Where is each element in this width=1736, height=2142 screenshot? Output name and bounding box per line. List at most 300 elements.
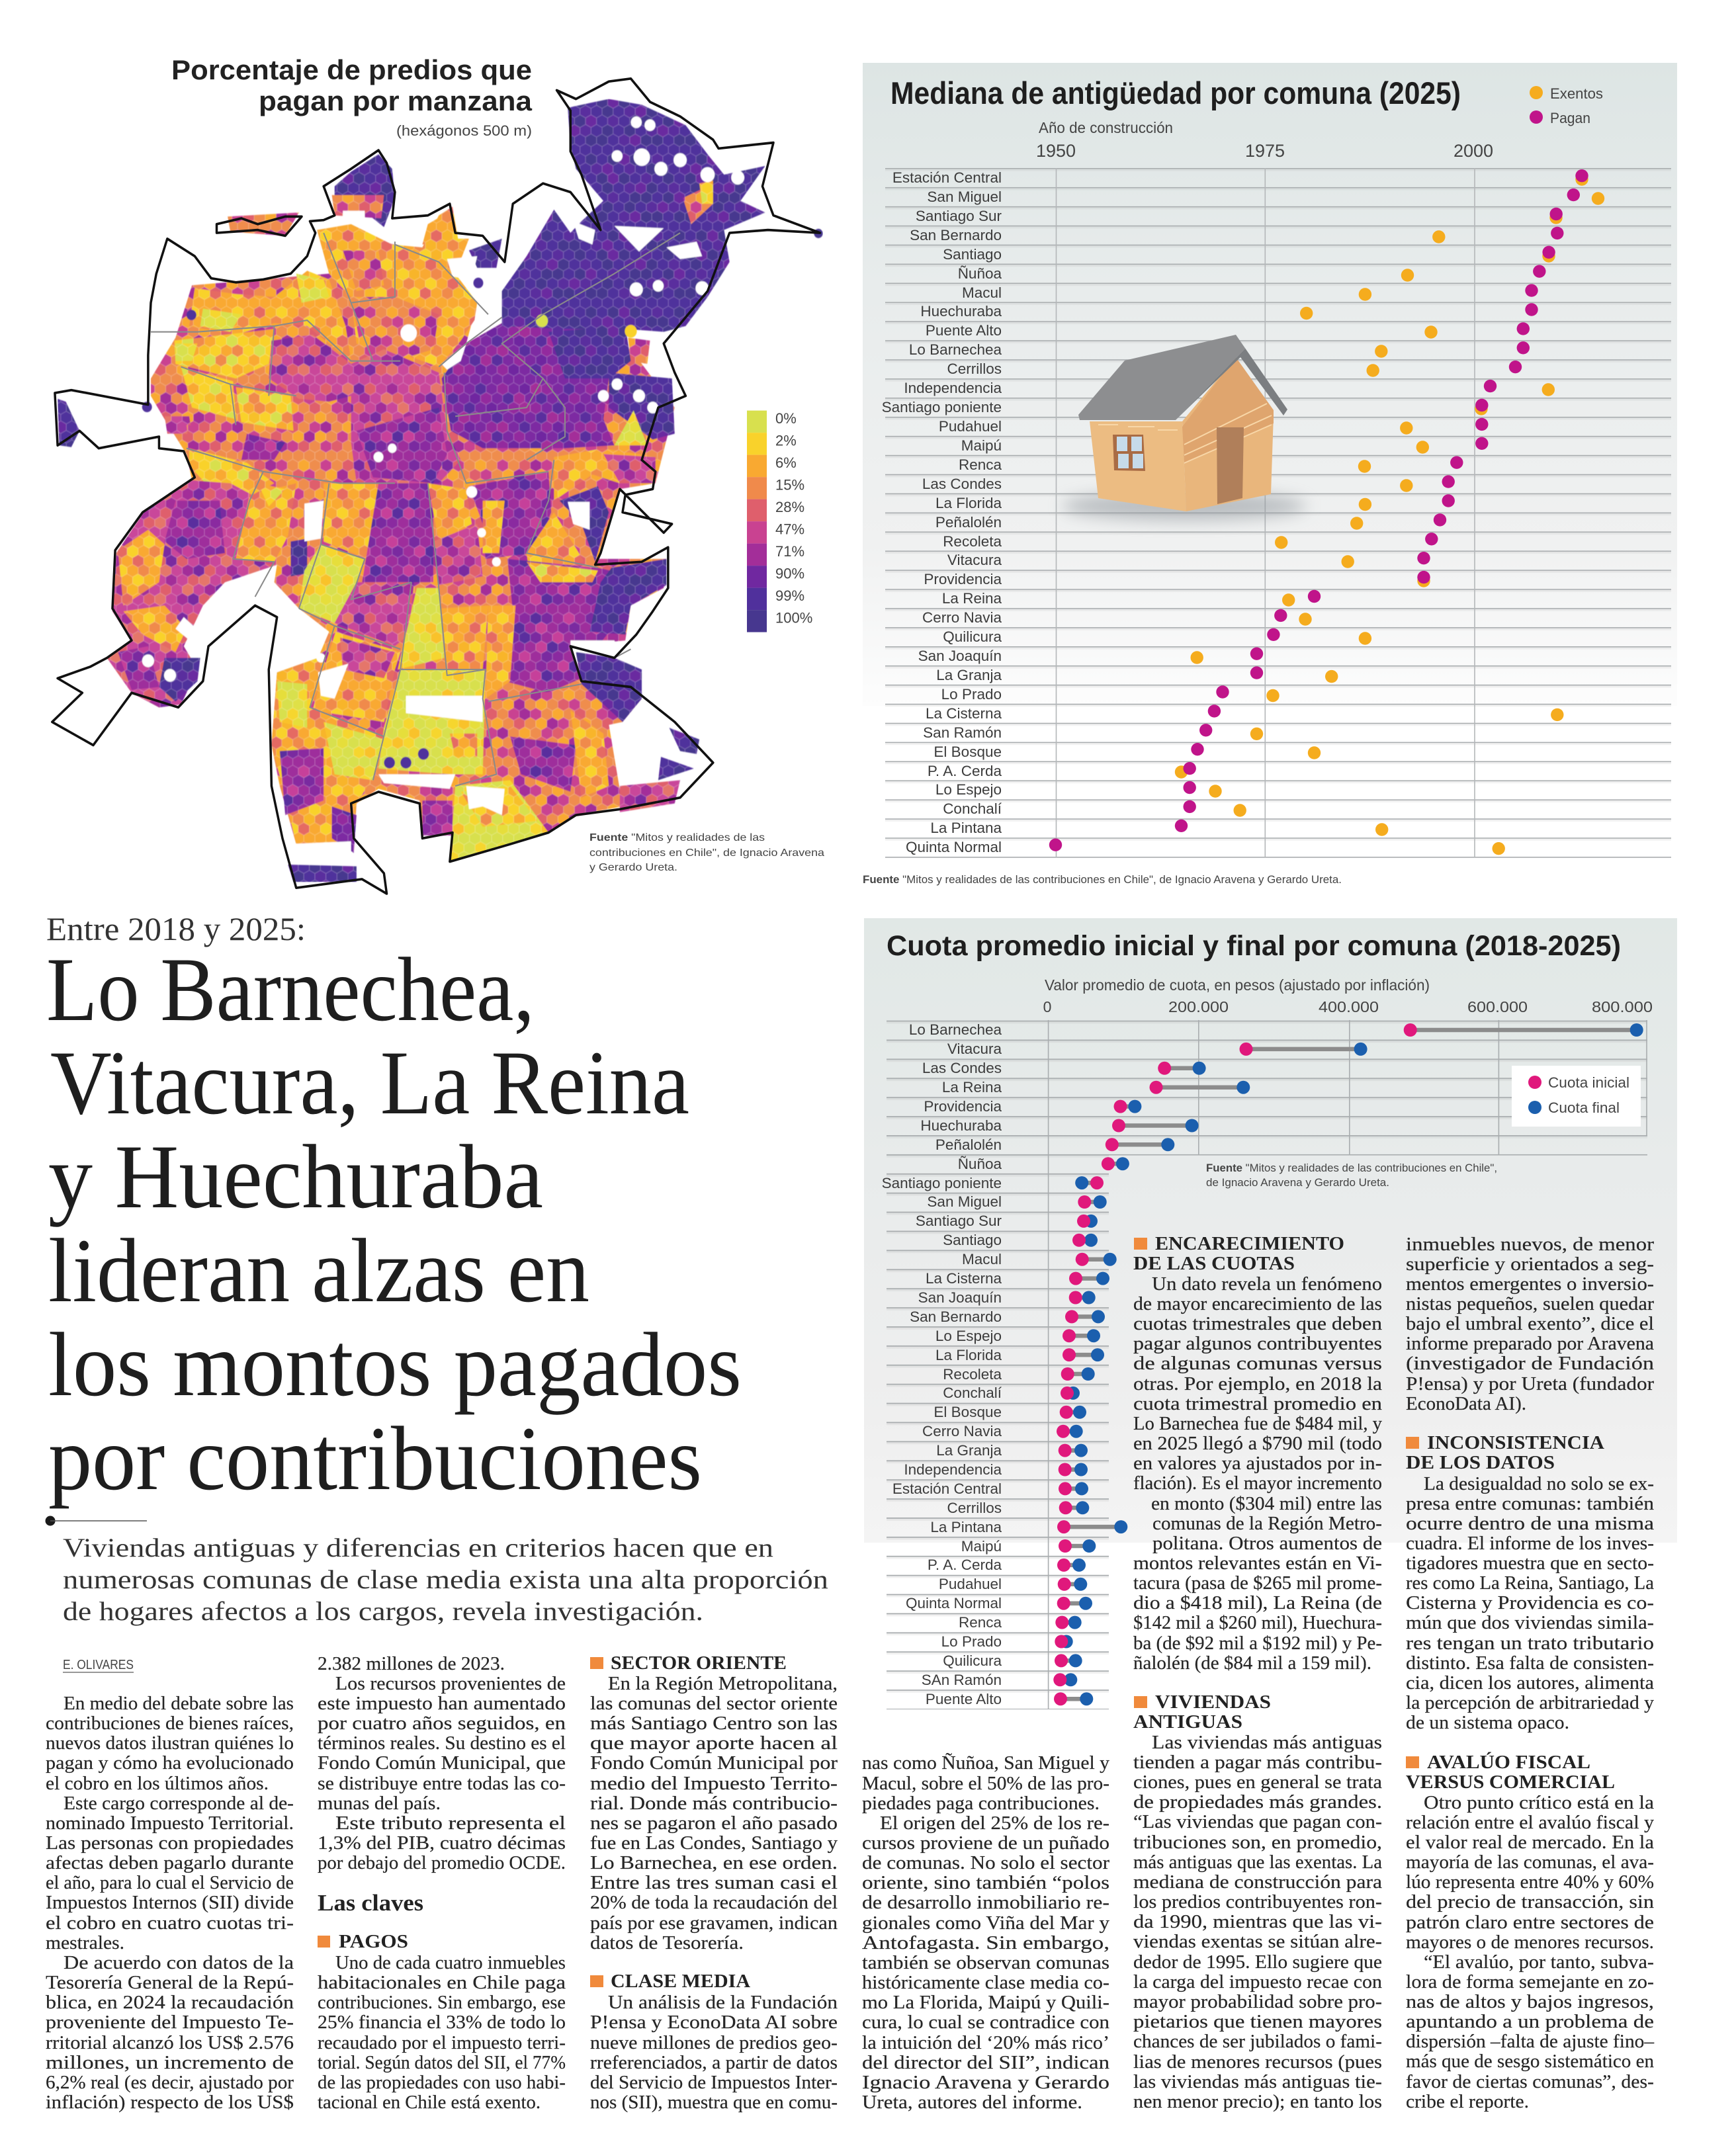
chart 2 background panel — [864, 918, 1677, 1543]
key point: pagos: PAGOS — [339, 1932, 408, 1952]
key point: pagos: habitacionales en Chile paga — [318, 1973, 566, 1993]
chart 2 comuna labels: Pudahuel — [939, 1576, 1002, 1592]
chart 1 dots: exentos — [1175, 173, 1604, 855]
key point: clase media: del Servicio de Impuestos Inter- — [590, 2073, 838, 2093]
main headline: los montos pagados — [48, 1314, 742, 1415]
chart 1 comuna labels: Lo Barnechea — [909, 341, 1002, 358]
chart 2 comuna labels: Puente Alto — [926, 1691, 1002, 1707]
chart 2 axis labels — [1043, 976, 1653, 1015]
key point: viviendas antiguas: viendas exentas se sitúan alre- — [1133, 1932, 1382, 1952]
key point: viviendas antiguas: informe preparado por Aravena — [1406, 1334, 1655, 1354]
text column 2: términos reales. Su destino es el — [318, 1733, 566, 1754]
chart 2 comuna labels: Las Condes — [922, 1060, 1002, 1076]
chart 1 comuna labels: Macul — [962, 284, 1002, 301]
key point: viviendas antiguas: ciones, pues en general se trata — [1133, 1772, 1383, 1793]
deck: Viviendas antiguas y diferencias en criterios hacen que en — [63, 1533, 773, 1563]
chart 1 comuna labels: P. A. Cerda — [928, 763, 1002, 779]
key point: viviendas antiguas: “Las viviendas que pagan con- — [1133, 1812, 1382, 1832]
key point: pagos: de las propiedades con uso habi- — [318, 2073, 566, 2093]
map source note — [589, 832, 824, 873]
key point: inconsistencia de los datos — [1406, 1433, 1655, 1733]
key point: avalúo fiscal versus comercial: lora de forma semejante en zo- — [1406, 1972, 1654, 1992]
chart 1 dots: pagan — [1049, 169, 1588, 851]
chart 2 comuna labels: Santiago — [943, 1232, 1002, 1248]
key point: viviendas antiguas: bajo el umbral exento”, dice el — [1406, 1314, 1654, 1334]
chart 2 axis labels: 400.000 — [1319, 998, 1379, 1015]
key point: viviendas antiguas: superficie y orientados a seg- — [1406, 1254, 1654, 1275]
map legend: 15% — [775, 476, 804, 493]
text column 1: De acuerdo con datos de la — [64, 1953, 294, 1973]
key point: avalúo fiscal versus comercial: relación entre el avalúo fiscal y — [1406, 1813, 1654, 1833]
headline block — [45, 910, 828, 1626]
key point: encarecimiento de las cuotas: otras. Por ejemplo, en 2018 la — [1133, 1374, 1383, 1394]
key point: clase media: históricamente clase media co- — [862, 1973, 1109, 1993]
key point: pagos — [318, 1932, 566, 2113]
key point: avalúo fiscal versus comercial: apuntando a un problema de — [1406, 2012, 1654, 2032]
chart 1 comuna labels: Maipú — [961, 437, 1002, 454]
key point: viviendas antiguas: (investigador de Fundación — [1406, 1353, 1654, 1374]
chart 1 comuna labels: San Bernardo — [910, 227, 1002, 243]
key point: clase media: de comunas. No solo el sector — [862, 1853, 1110, 1873]
key point: inconsistencia de los datos: res tengan un trato tributario — [1406, 1633, 1654, 1654]
key point: avalúo fiscal versus comercial: favor de ciertas comunas”, des- — [1406, 2072, 1654, 2092]
text column 1: contribuciones de bienes raíces, — [46, 1713, 294, 1734]
key point: encarecimiento de las cuotas: de algunas comunas versus — [1133, 1353, 1382, 1374]
chart 2 comuna labels: Huechuraba — [920, 1117, 1002, 1134]
chart 1 comuna labels: Vitacura — [947, 552, 1002, 568]
panel: median building age per comuna chart — [863, 63, 1677, 886]
text column 2: Fondo Común Municipal, que — [318, 1753, 566, 1774]
key point: clase media: Antofagasta. Sin embargo, — [862, 1933, 1109, 1953]
main headline: lideran alzas en — [48, 1220, 589, 1321]
key point: inconsistencia de los datos: cuadra. El informe de los inves- — [1406, 1533, 1654, 1554]
key point: inconsistencia de los datos: mún que dos viviendas simila- — [1406, 1613, 1654, 1633]
chart 1 comuna labels: San Joaquín — [918, 648, 1002, 664]
key point: inconsistencia de los datos: INCONSISTENCIA — [1427, 1433, 1605, 1453]
chart 2 axis labels: 600.000 — [1467, 998, 1528, 1015]
key point: encarecimiento de las cuotas: Lo Barnechea fue de $484 mil, y — [1133, 1414, 1382, 1434]
chart 2 comuna labels: Quilicura — [943, 1652, 1002, 1669]
chart 1 comuna labels: Peñalolén — [935, 514, 1002, 531]
key point: encarecimiento de las cuotas: cuotas trimestrales que deben — [1133, 1314, 1382, 1334]
chart 2 comuna labels: El Bosque — [933, 1404, 1002, 1420]
chart 2 comuna labels: Lo Prado — [941, 1633, 1002, 1650]
heading: Las claves: Las claves — [318, 1890, 423, 1916]
key point: inconsistencia de los datos: presa entre comunas: también — [1406, 1494, 1654, 1514]
key point: viviendas antiguas: inmuebles nuevos, de menor — [1406, 1234, 1655, 1255]
key point: encarecimiento de las cuotas: en monto ($304 mil) entre las — [1151, 1494, 1382, 1514]
chart 1 comuna labels: La Cisterna — [926, 705, 1002, 722]
key point: clase media: oriente, sino también “polos — [862, 1873, 1109, 1893]
map title — [171, 54, 533, 116]
chart 2 comuna labels: La Granja — [936, 1442, 1002, 1459]
chart 2 comuna labels — [882, 1021, 1002, 1707]
key point: clase media: Un análisis de la Fundación — [608, 1992, 838, 2013]
chart 2 comuna labels: La Reina — [942, 1079, 1002, 1095]
chart 2 legend — [1512, 1066, 1641, 1127]
chart 2 comuna labels: Macul — [962, 1251, 1002, 1267]
key point: viviendas antiguas: chances de ser jubilados o fami- — [1133, 2032, 1382, 2052]
chart 1 comuna labels: La Granja — [936, 667, 1002, 683]
text column 1: Las personas con propiedades — [46, 1833, 294, 1854]
key point: pagos: recaudado por el impuesto terri- — [318, 2033, 566, 2053]
chart 2 source note: Fuente "Mitos y realidades de las contribuciones en Chile", — [1206, 1162, 1497, 1174]
key point: sector oriente: datos de Tesorería. — [590, 1933, 744, 1953]
text column 1: afectas deben pagarlo durante — [46, 1853, 294, 1873]
chart 1 axis labels: Año de construcción — [1039, 119, 1173, 136]
chart 2 comuna labels: Independencia — [904, 1461, 1002, 1478]
chart 2 comuna labels: Lo Barnechea — [909, 1021, 1002, 1038]
map title: pagan por manzana — [259, 85, 533, 116]
chart 1 comuna labels: Santiago Sur — [916, 208, 1002, 224]
text column 1: pagan y cómo ha evolucionado — [46, 1753, 294, 1774]
key point: encarecimiento de las cuotas: flación). Es el mayor incremento — [1133, 1473, 1382, 1494]
map legend — [747, 410, 812, 632]
chart 1 comuna labels: Quilicura — [943, 628, 1002, 645]
key point: clase media: gionales como Viña del Mar y — [862, 1913, 1109, 1934]
chart 2 comuna labels: Santiago Sur — [916, 1213, 1002, 1229]
text column 2: 1,3% del PIB, cuatro décimas — [318, 1833, 566, 1854]
chart 1 background panel — [863, 63, 1677, 706]
key point: viviendas antiguas: ANTIGUAS — [1133, 1712, 1242, 1733]
key point: viviendas antiguas: P!ensa) y por Ureta (fundador — [1406, 1374, 1655, 1394]
chart 1 comuna labels: Quinta Normal — [906, 839, 1002, 855]
text column 2: Este tributo representa el — [335, 1813, 566, 1834]
key point: viviendas antiguas: de propiedades más grandes. — [1133, 1792, 1382, 1813]
chart 1 comuna labels — [882, 169, 1002, 855]
key point: viviendas antiguas: la carga del impuesto recae con — [1133, 1972, 1382, 1992]
chart 2 axis labels: 0 — [1043, 998, 1051, 1015]
key point: viviendas antiguas: nen menor precio); en tanto los — [1133, 2092, 1382, 2112]
key point: inconsistencia de los datos: Cisterna y Providencia es co- — [1406, 1593, 1654, 1613]
chart 2 comuna labels: La Florida — [935, 1347, 1002, 1363]
chart 1 legend: Exentos — [1550, 85, 1603, 102]
key point: sector oriente: que mayor aporte hacen al — [590, 1733, 838, 1754]
key point: viviendas antiguas: VIVIENDAS — [1155, 1692, 1271, 1713]
key point: encarecimiento de las cuotas: ba (de $92 mil a $192 mil) y Pe- — [1133, 1633, 1382, 1654]
chart 1 comuna labels: Santiago — [943, 246, 1002, 263]
key point: encarecimiento de las cuotas: politana. Otros aumentos de — [1152, 1533, 1382, 1554]
black regional outline — [52, 79, 820, 894]
key point: encarecimiento de las cuotas: DE LAS CUOTAS — [1133, 1254, 1295, 1274]
key point: inconsistencia de los datos: de un sistema opaco. — [1406, 1713, 1569, 1733]
map legend: 2% — [775, 433, 797, 449]
chart 2 comuna labels: Vitacura — [947, 1041, 1002, 1057]
key point: clase media: El origen del 25% de los re- — [880, 1813, 1109, 1834]
key point: sector oriente: Lo Barnechea, en ese orden. — [590, 1853, 838, 1873]
chart 2 grid — [887, 1020, 1647, 1709]
key point: encarecimiento de las cuotas: dio a $418 mil), La Reina (de — [1133, 1593, 1382, 1613]
panel: average initial and final quota chart — [864, 918, 1677, 1709]
chart 2 comuna labels: Maipú — [961, 1538, 1002, 1555]
chart 2 comuna labels: San Miguel — [927, 1193, 1002, 1210]
text column 1: el cobro en los últimos años. — [46, 1774, 269, 1794]
text column 2: por debajo del promedio OCDE. — [318, 1853, 566, 1873]
text column 1: el año, para lo cual el Servicio de — [46, 1873, 294, 1893]
key point: avalúo fiscal versus comercial: Otro punto crítico está en la — [1424, 1793, 1655, 1813]
key point: avalúo fiscal versus comercial: cribe el reporte. — [1406, 2092, 1529, 2112]
key point: encarecimiento de las cuotas: en 2025 llegó a $790 mil (todo — [1133, 1434, 1382, 1454]
key point: sector oriente: En la Región Metropolitana, — [608, 1674, 838, 1694]
map source note: contribuciones en Chile", de Ignacio Aravena — [589, 847, 824, 859]
key point: viviendas antiguas: pietarios que tienen mayores — [1133, 2012, 1382, 2032]
key point: clase media: rreferenciados, a partir de datos — [590, 2053, 838, 2073]
byline: E. OLIVARES — [63, 1658, 134, 1672]
chart 2 comuna labels: San Joaquín — [918, 1289, 1002, 1306]
key point: sector oriente: 20% de toda la recaudación del — [590, 1893, 838, 1913]
map legend: 99% — [775, 587, 804, 604]
chart 1 comuna labels: Providencia — [924, 571, 1002, 587]
key point: inconsistencia de los datos: res como La Reina, Santiago, La — [1406, 1573, 1655, 1594]
key point: avalúo fiscal versus comercial — [1406, 1752, 1655, 2112]
chart 1 comuna labels: El Bosque — [933, 744, 1002, 760]
main headline: y Huechuraba — [48, 1126, 543, 1227]
key point: pagos: 25% financia el 33% de todo lo — [318, 2012, 566, 2033]
key point: clase media: cursos proviene de un puñado — [862, 1833, 1109, 1854]
chart 2 comuna labels: Providencia — [924, 1098, 1002, 1115]
key point: clase media: de desarrollo inmobiliario re- — [862, 1893, 1109, 1913]
icon: house illustration — [1062, 335, 1307, 521]
chart 2 comuna labels: Lo Espejo — [935, 1328, 1002, 1344]
text column 1 — [46, 1693, 294, 2113]
chart 1 comuna labels: Lo Prado — [941, 686, 1002, 703]
map legend: 0% — [775, 410, 797, 427]
key point: viviendas antiguas: tienden a pagar más contribu- — [1133, 1752, 1382, 1773]
key point: avalúo fiscal versus comercial: más que de sesgo sistemático en — [1406, 2051, 1654, 2072]
key point: sector oriente: medio del Impuesto Territo- — [590, 1774, 838, 1794]
key point: viviendas antiguas: da 1990, mientras que las vi- — [1133, 1912, 1382, 1932]
chart 2 comuna labels: La Pintana — [930, 1519, 1002, 1535]
main headline — [46, 939, 742, 1509]
key point: clase media: nueve millones de predios geo- — [590, 2033, 838, 2053]
key point: sector oriente: fue en Las Condes, Santiago y — [590, 1833, 838, 1854]
key point: inconsistencia de los datos: cia, dicen los autores, alimenta — [1406, 1673, 1655, 1693]
text column 2: se distribuye entre todas las co- — [318, 1774, 566, 1794]
chart 2 comuna labels: San Bernardo — [910, 1308, 1002, 1325]
text column 1: 6,2% real (es decir, ajustado por — [46, 2073, 294, 2093]
key point: viviendas antiguas: lias de menores recursos (pues — [1133, 2052, 1382, 2073]
map source note: y Gerardo Ureta. — [589, 862, 677, 873]
key point: avalúo fiscal versus comercial: patrón claro entre sectores de — [1406, 1912, 1654, 1933]
chart 1 comuna labels: Cerrillos — [947, 361, 1002, 377]
text column 1: Impuestos Internos (SII) divide — [46, 1893, 294, 1913]
key point: sector oriente: Fondo Común Municipal por — [590, 1753, 838, 1774]
key point: sector oriente: más Santiago Centro son las — [590, 1713, 838, 1734]
chart 1 title: Mediana de antigüedad por comuna (2025) — [890, 75, 1461, 110]
key point: viviendas antiguas: nistas pequeños, suelen quedar — [1406, 1294, 1655, 1314]
chart 1 grid — [885, 168, 1671, 858]
chart 1 comuna labels: Conchalí — [943, 800, 1002, 817]
key point: sector oriente: país por ese gravamen, indican — [590, 1913, 838, 1934]
key point: clase media: Macul, sobre el 50% de las pro- — [862, 1774, 1109, 1794]
key point: clase media: del director del SII”, indican — [862, 2053, 1109, 2073]
chart 2 source note: de Ignacio Aravena y Gerardo Ureta. — [1206, 1176, 1389, 1189]
chart 1 comuna labels: La Reina — [942, 590, 1002, 607]
chart 1 comuna labels: Las Condes — [922, 476, 1002, 492]
key point: pagos: torial. Según datos del SII, el 77% — [318, 2053, 566, 2073]
chart 2 axis labels: Valor promedio de cuota, en pesos (ajustado por inflación) — [1045, 976, 1430, 994]
text column 2: Los recursos provenientes de — [335, 1674, 566, 1694]
key point: inconsistencia de los datos: La desigualdad no solo se ex- — [1424, 1474, 1654, 1494]
key point: clase media: Ignacio Aravena y Gerardo — [862, 2073, 1109, 2093]
key point: clase media — [590, 1753, 1110, 2113]
text column 1: mestrales. — [46, 1933, 124, 1953]
map subtitle: (hexágonos 500 m) — [396, 122, 532, 139]
key point: sector oriente — [590, 1653, 838, 1953]
chart 1 axis labels: 1975 — [1245, 141, 1285, 161]
text column 1: En medio del debate sobre las — [64, 1693, 294, 1714]
map legend: 28% — [775, 499, 804, 515]
key point: inconsistencia de los datos: ocurre dentro de una misma — [1406, 1514, 1655, 1534]
chart 2 comuna labels: La Cisterna — [926, 1270, 1002, 1287]
key point: encarecimiento de las cuotas: en valores ya ajustados por in- — [1133, 1453, 1382, 1474]
key point: viviendas antiguas: los predios contribuyentes ron- — [1133, 1892, 1382, 1912]
chart 1 comuna labels: San Miguel — [927, 189, 1002, 205]
text column 1: blica, en 2024 la recaudación — [46, 1992, 294, 2013]
key point: clase media: nos (SII), muestra que en comu- — [590, 2092, 838, 2113]
key point: clase media: piedades paga contribuciones. — [862, 1793, 1100, 1814]
main headline: por contribuciones — [48, 1408, 702, 1509]
deck — [63, 1533, 828, 1626]
chart 2 source note — [1206, 1162, 1497, 1189]
key point: encarecimiento de las cuotas: montos relevantes están en Vi- — [1133, 1553, 1382, 1574]
chart 2 comuna labels: Renca — [959, 1614, 1002, 1631]
key point: encarecimiento de las cuotas: cuota trimestral promedio en — [1133, 1394, 1382, 1414]
key point: inconsistencia de los datos: tigadores muestra que en secto- — [1406, 1553, 1654, 1574]
key point: encarecimiento de las cuotas: tacura (pasa de $265 mil prome- — [1133, 1573, 1382, 1594]
chart 1 axis labels: 1950 — [1036, 141, 1076, 161]
chart 1 comuna labels: Estación Central — [892, 169, 1002, 186]
key point: sector oriente: nes se pagaron el año pasado — [590, 1813, 838, 1834]
chart 1 comuna labels: La Florida — [935, 495, 1002, 511]
chart 1 comuna labels: Huechuraba — [920, 303, 1002, 320]
key point: avalúo fiscal versus comercial: lúo representa entre 40% y 60% — [1406, 1872, 1654, 1893]
text column 2 — [318, 1654, 566, 1873]
key point: avalúo fiscal versus comercial: “El avalúo, por tanto, subva- — [1424, 1952, 1654, 1973]
chart 1 legend: Pagan — [1550, 110, 1590, 126]
chart 1 comuna labels: Independencia — [904, 380, 1002, 396]
key point: viviendas antiguas: dedor de 1995. Ello sugiere que — [1133, 1952, 1382, 1973]
chart 2 comuna labels: Estación Central — [892, 1480, 1002, 1497]
chart 1 comuna labels: Renca — [959, 456, 1002, 473]
key point: avalúo fiscal versus comercial: AVALÚO FISCAL — [1427, 1752, 1590, 1773]
chart 2 comuna labels: Quinta Normal — [906, 1595, 1002, 1611]
map title: Porcentaje de predios que — [171, 54, 532, 85]
chart 1 comuna labels: Lo Espejo — [935, 781, 1002, 798]
key point: viviendas antiguas: mentos emergentes o inversio- — [1406, 1274, 1654, 1295]
key point: sector oriente: Entre las tres suman casi el — [590, 1873, 838, 1893]
chart 2 dots: cuota inicial — [1053, 1023, 1417, 1705]
key point: inconsistencia de los datos: distinto. Esa falta de consisten- — [1406, 1653, 1654, 1674]
map legend: 71% — [775, 543, 804, 560]
chart 2 comuna labels: Santiago poniente — [882, 1175, 1002, 1191]
chart 1 comuna labels: San Ramón — [923, 724, 1002, 741]
chart 1 comuna labels: Recoleta — [943, 533, 1002, 550]
key point: encarecimiento de las cuotas: comunas de la Región Metro- — [1152, 1514, 1382, 1534]
key point: clase media: cura, lo cual se contradice con — [862, 2012, 1109, 2033]
text column 1: millones, un incremento de — [46, 2053, 294, 2073]
key point: inconsistencia de los datos: DE LOS DATOS — [1406, 1453, 1555, 1473]
key point: clase media: P!ensa y EconoData AI sobre — [590, 2012, 838, 2033]
key point: viviendas antiguas: las viviendas más antiguas tie- — [1133, 2072, 1382, 2092]
chart 2 axis labels: 800.000 — [1592, 998, 1653, 1015]
text column 1: Este cargo corresponde al de- — [64, 1793, 294, 1814]
chart 2 axis labels: 200.000 — [1168, 998, 1229, 1015]
chart 1 comuna labels: La Pintana — [930, 820, 1002, 836]
key point: viviendas antiguas: mayor probabilidad sobre pro- — [1133, 1992, 1382, 2012]
text column 1: inflación) respecto de los US$ — [46, 2092, 294, 2113]
text column 2: por cuatro años seguidos, en — [318, 1713, 566, 1734]
deck: de hogares afectos a los cargos, revela investigación. — [63, 1596, 703, 1626]
chart 2 comuna labels: Cerro Navia — [922, 1423, 1002, 1439]
chart 1 comuna labels: Santiago poniente — [882, 399, 1002, 415]
chart 1 comuna labels: Pudahuel — [939, 418, 1002, 435]
map legend: 6% — [775, 454, 797, 471]
key point: avalúo fiscal versus comercial: mayoría de las comunas, el ava- — [1406, 1852, 1654, 1873]
map panel: percentage of paying properties per block — [52, 54, 824, 894]
chart 2 comuna labels: Peñalolén — [935, 1136, 1002, 1153]
key point: viviendas antiguas: tribuciones son, en promedio, — [1133, 1832, 1382, 1853]
chart 1 comuna labels: Ñuñoa — [958, 265, 1002, 282]
key point: clase media: la intuición del ‘20% más rico’ — [862, 2033, 1109, 2053]
text column 2: 2.382 millones de 2023. — [318, 1654, 505, 1674]
key point: encarecimiento de las cuotas — [1133, 1234, 1383, 1674]
key point: clase media: también se observan comunas — [862, 1953, 1109, 1973]
key point: viviendas antiguas: mediana de construcción para — [1133, 1872, 1383, 1893]
text column 2: este impuesto han aumentado — [318, 1693, 566, 1714]
main headline: Vitacura, La Reina — [50, 1032, 689, 1133]
headline rule with dot — [45, 1516, 147, 1525]
chart 2 comuna labels: Ñuñoa — [958, 1156, 1002, 1172]
text column 1: el cobro en cuatro cuotas tri- — [46, 1913, 294, 1934]
key point: encarecimiento de las cuotas: ñalolén (de $84 mil a 159 mil). — [1133, 1653, 1371, 1674]
text column 1: nominado Impuesto Territorial. — [46, 1813, 294, 1834]
chart 2 connector lines — [1060, 1030, 1637, 1699]
key point: pagos: Uno de cada cuatro inmuebles — [335, 1953, 566, 1973]
key point: avalúo fiscal versus comercial: del precio de transacción, sin — [1406, 1892, 1654, 1912]
main headline: Lo Barnechea, — [46, 939, 535, 1040]
chart 2 title: Cuota promedio inicial y final por comuna (2018-2025) — [887, 930, 1621, 962]
chart 1 axis labels — [1036, 119, 1493, 161]
chart 2 legend: Cuota inicial — [1548, 1074, 1629, 1091]
key point: avalúo fiscal versus comercial: el valor real de mercado. En la — [1406, 1832, 1655, 1853]
key point: inconsistencia de los datos: la percepción de arbitrariedad y — [1406, 1693, 1654, 1713]
map legend: 100% — [775, 610, 812, 626]
key point: encarecimiento de las cuotas: Un dato revela un fenómeno — [1152, 1274, 1382, 1295]
key point: avalúo fiscal versus comercial: nas de altos y bajos ingresos, — [1406, 1992, 1654, 2012]
chart 1 source note: Fuente "Mitos y realidades de las contribuciones en Chile", de Ignacio Aravena y Gerardo Ureta. — [863, 873, 1342, 886]
text column 1: nuevos datos ilustran quiénes lo — [46, 1733, 294, 1754]
key point: clase media: mo La Florida, Maipú y Quili- — [862, 1992, 1109, 2013]
chart 2 comuna labels: Cerrillos — [947, 1500, 1002, 1516]
text column 2: munas del país. — [318, 1793, 441, 1814]
text column 1: proveniente del Impuesto Te- — [46, 2012, 294, 2033]
text column 1: Tesorería General de la Repú- — [46, 1973, 294, 1993]
key point: avalúo fiscal versus comercial: dispersión –falta de ajuste fino– — [1406, 2032, 1655, 2052]
chart 2 comuna labels: Recoleta — [943, 1366, 1002, 1383]
chart 1 comuna labels: Puente Alto — [926, 322, 1002, 339]
key point: viviendas antiguas — [1133, 1234, 1655, 2112]
key point: avalúo fiscal versus comercial: mayores o de menores recursos. — [1406, 1932, 1654, 1953]
chart 1 axis labels: 2000 — [1454, 141, 1493, 161]
key point: pagos: tacional en Chile está exento. — [318, 2092, 541, 2113]
key point: clase media: nas como Ñuñoa, San Miguel y — [862, 1753, 1109, 1774]
hexagon choropleth map of Santiago — [52, 79, 823, 894]
chart 2 dots: cuota final — [1060, 1023, 1643, 1705]
chart 2 legend: Cuota final — [1548, 1099, 1620, 1116]
kicker: Entre 2018 y 2025: — [46, 910, 306, 947]
key point: clase media: Ureta, autores del informe. — [862, 2092, 1082, 2113]
